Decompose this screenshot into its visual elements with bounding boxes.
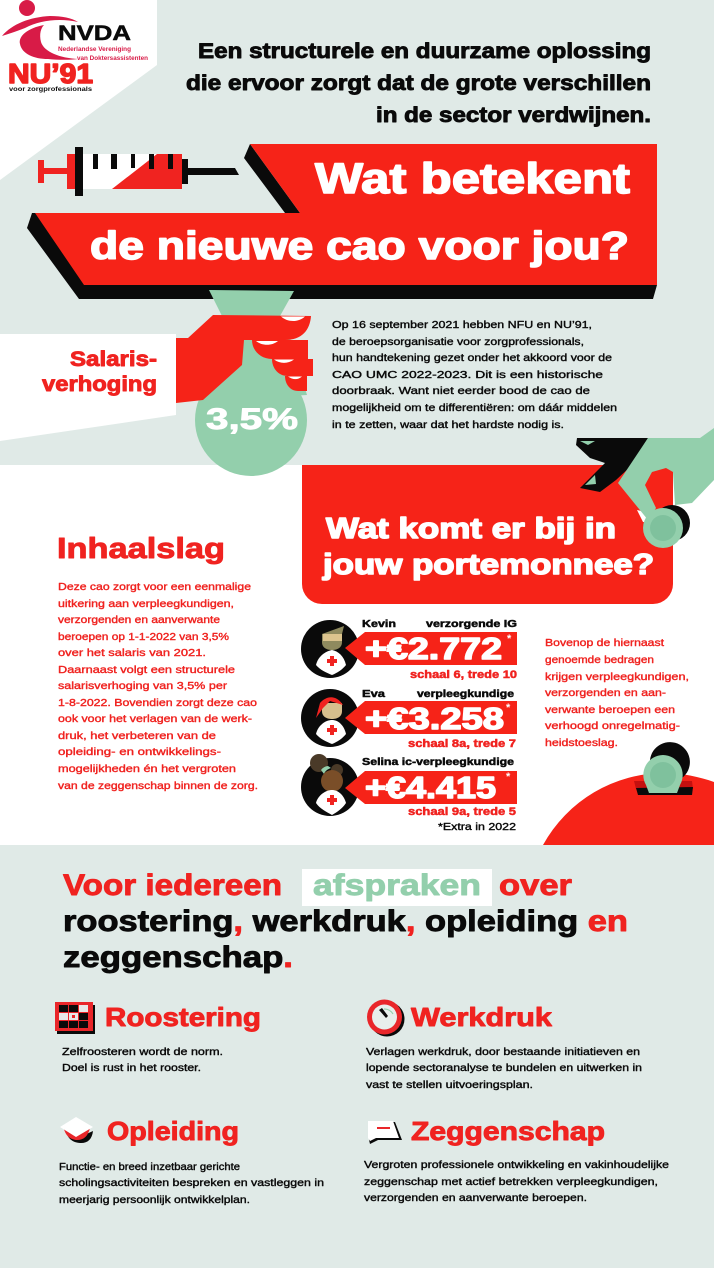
logo: NVDA xyxy=(2,0,148,62)
text: toeslag: verwante beroepen een xyxy=(545,704,675,716)
panel: portemonnee heading: jouw portemonnee? xyxy=(322,549,654,581)
row: Eva xyxy=(301,688,517,750)
section: werkdruk xyxy=(366,1000,642,1091)
intro heading: die ervoor zorgt dat de grote verschillen xyxy=(186,72,651,95)
intro text: de beroepsorganisatie voor zorgprofessionals, xyxy=(332,336,584,348)
logo: NVDA: NVDA xyxy=(58,22,131,45)
section: roostering: Zelfroosteren wordt de norm. xyxy=(62,1046,223,1058)
icon: graduation cap xyxy=(60,1117,93,1143)
row: Kevin: +€2.772 xyxy=(365,631,502,666)
intro text xyxy=(332,319,617,431)
section: opleiding xyxy=(59,1116,324,1206)
text: inhaalslag xyxy=(58,581,258,792)
row: Kevin: verzorgende IG xyxy=(426,618,517,630)
text: toeslag: heidstoeslag. xyxy=(545,737,618,749)
icon: syringe xyxy=(38,147,239,196)
intro text: Op 16 september 2021 hebben NFU en NU’91, xyxy=(332,319,592,331)
heading: inhaalslag: Inhaalslag xyxy=(57,533,225,565)
section: opleiding: Opleiding xyxy=(107,1116,239,1146)
text: inhaalslag: druk, het verbeteren van de xyxy=(58,730,216,742)
row: Eva: schaal 8a, trede 7 xyxy=(408,738,516,750)
panel: salaris label xyxy=(0,334,176,441)
text: inhaalslag: van de zeggenschap binnen de zorg. xyxy=(58,780,258,792)
section: zeggenschap: Zeggenschap xyxy=(411,1116,605,1146)
text: inhaalslag: mogelijkheden én het vergroten xyxy=(58,763,236,775)
text: inhaalslag: Deze cao zorgt voor een eenmalige xyxy=(58,581,251,593)
footnote: *Extra in 2022 xyxy=(438,821,516,833)
row: Eva: +€3.258 xyxy=(365,701,504,736)
heading: voor iedereen: roostering , werkdruk , opleiding en xyxy=(63,905,628,938)
text: inhaalslag: ook voor het verlagen van de werk- xyxy=(58,713,253,725)
heading: voor iedereen xyxy=(63,869,628,974)
heading: voor iedereen: afspraken xyxy=(313,869,481,902)
intro heading: Een structurele en duurzame oplossing xyxy=(198,40,651,63)
text: toeslag: Bovenop de hiernaast xyxy=(545,637,664,649)
section: opleiding: scholingsactiviteiten bespreken en vastleggen in xyxy=(59,1177,324,1189)
text: inhaalslag: Daarnaast volgt een structurele xyxy=(58,664,235,676)
text: inhaalslag: over het salaris van 2021. xyxy=(58,647,206,659)
text: toeslag xyxy=(545,637,689,749)
title xyxy=(90,155,630,268)
section: werkdruk: lopende sectoranalyse te bundelen en uitwerken in xyxy=(366,1062,642,1074)
row: Selina xyxy=(301,754,517,833)
logo: NU'91: NU’91 xyxy=(8,58,93,89)
section: roostering: Doel is rust in het rooster. xyxy=(62,1062,201,1074)
row: Eva: * xyxy=(506,702,511,714)
intro heading: in de sector verdwijnen. xyxy=(376,104,651,127)
text: toeslag: genoemde bedragen xyxy=(545,654,654,666)
panel: portemonnee heading xyxy=(302,465,673,604)
row: Selina: * xyxy=(506,771,511,783)
row: Eva: Eva xyxy=(362,688,385,700)
heading: voor iedereen: Voor iedereen xyxy=(63,869,282,902)
section: opleiding: Functie- en breed inzetbaar gerichte xyxy=(59,1161,240,1173)
text: inhaalslag: verzorgenden en aanverwante xyxy=(58,614,220,626)
section: zeggenschap: verzorgenden en aanverwante beroepen. xyxy=(364,1192,587,1204)
logo: NVDA: Nederlandse Vereniging xyxy=(58,46,131,53)
title banner xyxy=(27,144,657,299)
intro text: hun handtekening gezet onder het akkoord voor de xyxy=(332,352,612,364)
text: inhaalslag: uitkering aan verpleegkundigen, xyxy=(58,598,234,610)
text: inhaalslag: beroepen op 1-1-2022 van 3,5% xyxy=(58,631,229,643)
section: roostering xyxy=(55,1002,261,1074)
panel: portemonnee heading: Wat komt er bij in xyxy=(326,513,616,545)
row: Selina: schaal 9a, trede 5 xyxy=(408,806,516,818)
intro text: doorbraak. Want niet eerder bood de cao de xyxy=(332,385,590,397)
row: Selina: Selina ic-verpleegkundige xyxy=(362,756,514,768)
text: toeslag: verzorgenden en aan- xyxy=(545,687,667,699)
row: Kevin: Kevin xyxy=(362,618,396,630)
title: de nieuwe cao voor jou? xyxy=(90,225,629,268)
percentage: 3,5% xyxy=(206,403,298,436)
text: toeslag: krijgen verpleegkundigen, xyxy=(545,671,689,683)
logo panel xyxy=(0,0,157,180)
logo: NVDA: van Doktersassistenten xyxy=(77,55,148,62)
intro heading xyxy=(186,40,651,127)
section: werkdruk: vast te stellen uitvoeringsplan. xyxy=(366,1079,533,1091)
icon: speech bubble xyxy=(368,1121,402,1144)
row: Selina: +€4.415 xyxy=(365,770,496,805)
section: roostering: Roostering xyxy=(105,1002,261,1032)
row: Kevin: schaal 6, trede 10 xyxy=(410,669,517,681)
icon: stopwatch xyxy=(367,1000,404,1036)
section: zeggenschap xyxy=(364,1116,669,1204)
text: inhaalslag: 1-8-2022. Bovendien zorgt deze cao xyxy=(58,697,257,709)
section: zeggenschap: zeggenschap met actief betrekken verpleegkundigen, xyxy=(364,1176,658,1188)
icon: piggy bank with coin xyxy=(543,742,714,845)
section: werkdruk: Werkdruk xyxy=(411,1002,553,1032)
icon: money bag held by hand xyxy=(176,290,313,476)
heading: voor iedereen: zeggenschap . xyxy=(63,941,293,974)
row: Eva: verpleegkundige xyxy=(417,688,514,700)
section: opleiding: meerjarig persoonlijk ontwikkelplan. xyxy=(59,1194,250,1206)
intro text: CAO UMC 2022-2023. Dit is een historische xyxy=(332,369,603,381)
intro text: mogelijkheid om te differentiëren: om dáár middelen xyxy=(332,402,617,414)
logo: NU'91: voor zorgprofessionals xyxy=(9,86,92,93)
heading: voor iedereen: over xyxy=(499,869,572,902)
icon: calendar xyxy=(55,1002,95,1034)
row: Kevin xyxy=(301,618,517,681)
text: inhaalslag: opleiding- en ontwikkelings- xyxy=(58,746,222,758)
icon: hand with coin xyxy=(576,428,714,548)
panel: salaris label: Salaris- xyxy=(70,348,157,371)
text: toeslag: verhoogd onregelmatig- xyxy=(545,720,681,732)
section: werkdruk: Verlagen werkdruk, door bestaande initiatieven en xyxy=(366,1046,640,1058)
section: zeggenschap: Vergroten professionele ontwikkeling en vakinhoudelijke xyxy=(364,1159,669,1171)
title: Wat betekent xyxy=(315,155,630,203)
text: inhaalslag: salarisverhoging van 3,5% per xyxy=(58,680,228,692)
intro text: in te zetten, waar dat het hardste nodig is. xyxy=(332,419,564,431)
panel: salaris label: verhoging xyxy=(42,373,157,396)
row: Kevin: * xyxy=(507,633,512,645)
